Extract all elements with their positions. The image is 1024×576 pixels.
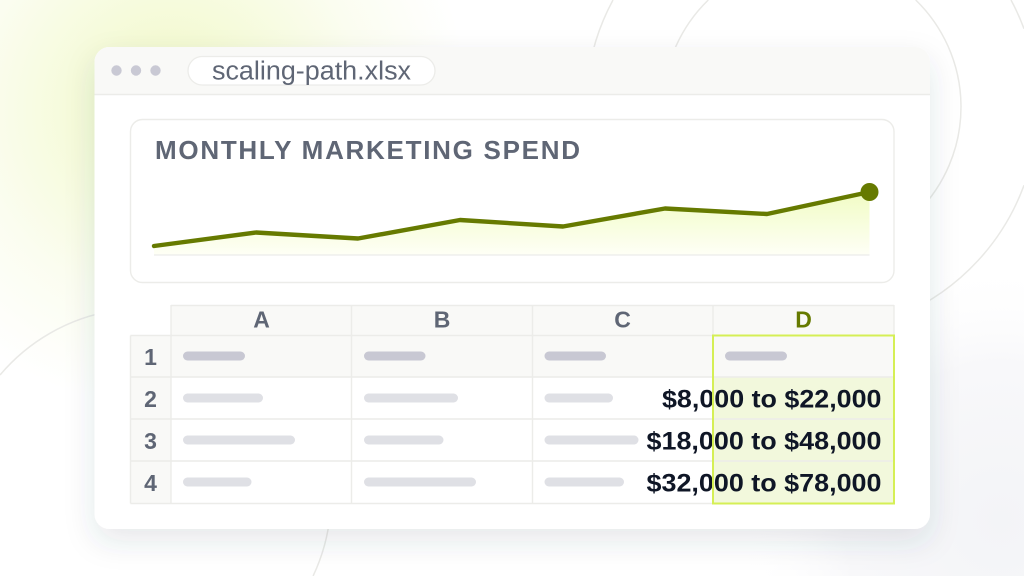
panel: chart card: [130, 120, 894, 282]
column headers: A: [253, 307, 270, 333]
window control dots: [111, 65, 161, 76]
placeholder bars: header row: [183, 352, 787, 360]
row numbers: 1: [144, 344, 157, 370]
panel: spreadsheet window: [94, 47, 930, 529]
placeholder bars: data rows: [183, 394, 638, 486]
column headers: D: [795, 307, 812, 333]
file name pill: scaling-path.xlsx: [212, 58, 411, 86]
window title bar: [94, 47, 930, 94]
row numbers: 2: [144, 386, 157, 412]
spend range values: $8,000 to $22,000: [662, 386, 882, 414]
chart heading: MONTHLY MARKETING SPEND: [155, 135, 580, 165]
row numbers: 4: [144, 470, 157, 496]
panel: spreadsheet table: [130, 305, 894, 504]
column headers: [253, 307, 812, 333]
spend range values: $18,000 to $48,000: [646, 428, 882, 456]
row numbers: [144, 344, 157, 496]
column headers: C: [614, 307, 631, 333]
table grid: [130, 305, 894, 504]
line chart: [154, 183, 878, 255]
column headers: B: [434, 307, 450, 333]
spend range values: $32,000 to $78,000: [646, 470, 882, 498]
column D highlight border: [713, 336, 894, 504]
highlighted column fill: [713, 377, 894, 504]
row numbers: 3: [144, 428, 157, 454]
window body: [94, 47, 930, 529]
spend range values: [646, 386, 882, 498]
header and row-label fills: [130, 305, 894, 504]
